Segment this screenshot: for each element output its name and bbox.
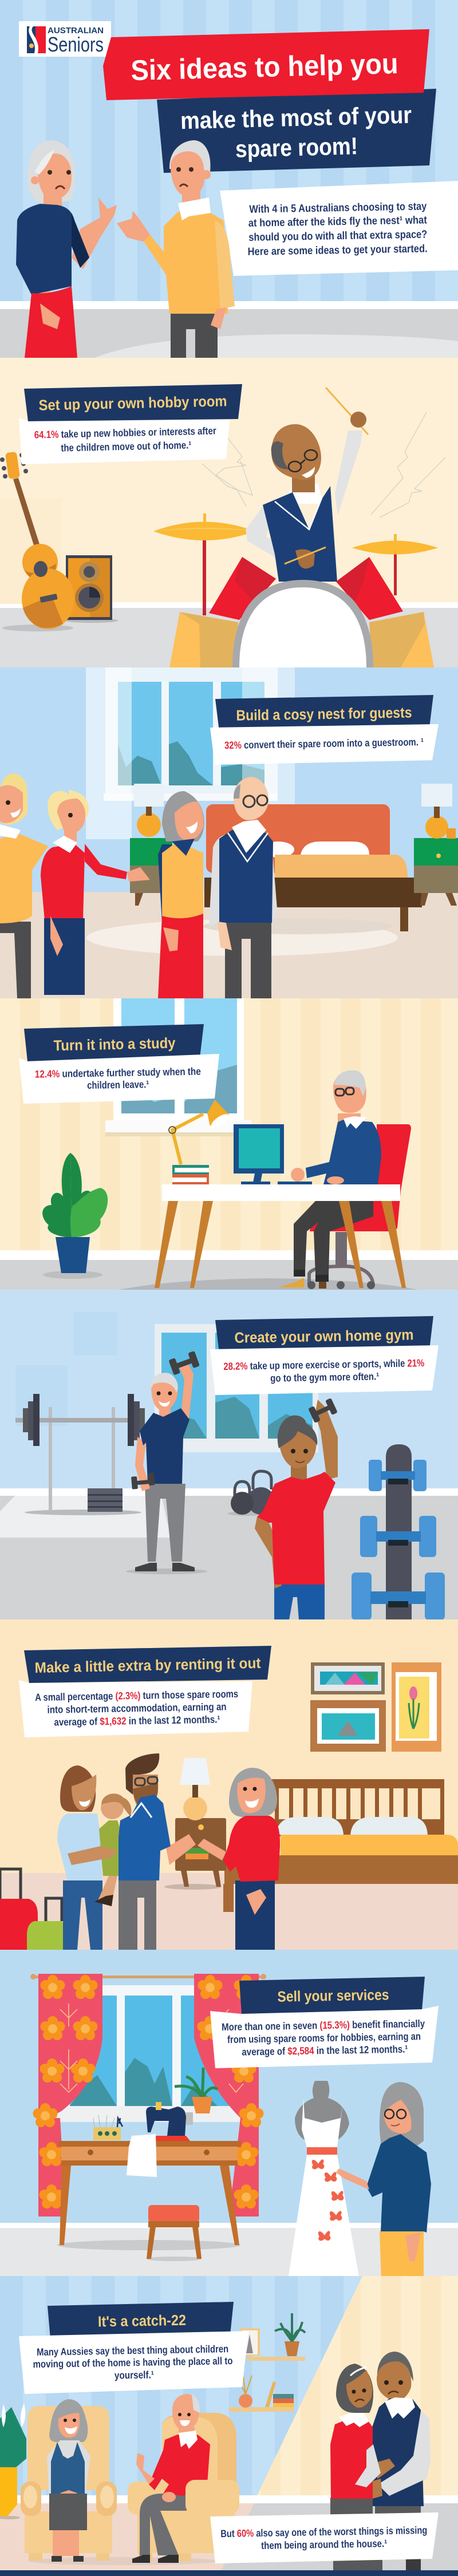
- mannequin and dress: [288, 2081, 360, 2279]
- floor: [0, 1873, 458, 1950]
- wall: [0, 1619, 458, 1873]
- books: [172, 1165, 209, 1185]
- figure: grey-haired woman: [158, 791, 204, 998]
- body text: [35, 1065, 201, 1092]
- floor: [0, 1260, 458, 1290]
- body text: children leave.¹: [87, 1078, 149, 1091]
- logo: Australian Seniors: Seniors: [48, 33, 104, 56]
- body text: 32% convert their spare room into a guestroom. ¹: [224, 736, 424, 751]
- footer bar: [0, 2570, 458, 2576]
- card: [19, 1680, 252, 1737]
- wall: [0, 1290, 458, 1488]
- desk lamp: [169, 1100, 231, 1164]
- floor: [0, 1496, 458, 1620]
- bed: [204, 804, 422, 931]
- plant pot: [175, 2068, 218, 2113]
- heading: It's a catch-22: [98, 2312, 186, 2330]
- wall: [0, 667, 458, 892]
- title: make the most of your: [180, 101, 412, 134]
- speaker: [65, 555, 118, 623]
- body text: [220, 2524, 428, 2552]
- barbell rack: [15, 1394, 145, 1515]
- body text: the children move out of home.¹: [61, 439, 191, 454]
- heading card: gym: [210, 1316, 439, 1395]
- heading: Set up your own hobby room: [38, 392, 227, 414]
- wall shelves: [229, 2313, 305, 2412]
- floor: [0, 2228, 458, 2279]
- intro text: at home after the kids fly the nest¹ what: [248, 214, 428, 230]
- sewing box: [93, 2115, 123, 2140]
- floor: [0, 608, 458, 667]
- card: worst thing: [210, 2512, 439, 2563]
- stool: [147, 2205, 202, 2261]
- floor: [0, 892, 458, 999]
- body text: 28.2% take up more exercise or sports, while 21%: [223, 1357, 424, 1372]
- banner: [48, 2302, 234, 2339]
- figure: drummer: [246, 388, 368, 582]
- cream wall: [0, 2276, 458, 2495]
- figure: man with yellow sweater: [0, 773, 48, 998]
- intro text: [247, 200, 428, 258]
- body text: average of $2,584 in the last 12 months.¹: [242, 2043, 408, 2058]
- intro text: Here are some ideas to get your started.: [247, 243, 428, 258]
- figure: sad man: [358, 2352, 431, 2516]
- body text: go to the gym more often.¹: [270, 1370, 379, 1384]
- body text: [222, 2018, 425, 2058]
- wall: [0, 0, 458, 301]
- card: [210, 724, 439, 765]
- body text: yourself.¹: [114, 2369, 154, 2381]
- dumbbell rack: [352, 1444, 445, 1620]
- banner: [24, 1024, 204, 1061]
- figure: seated woman: [47, 2399, 90, 2562]
- body text: average of $1,632 in the last 12 months.¹: [54, 1713, 220, 1728]
- banner: [239, 1977, 425, 2014]
- body text: them being around the house.¹: [261, 2538, 387, 2551]
- heading: Build a cosy nest for guests: [236, 704, 412, 724]
- figure: child: [68, 1793, 131, 1906]
- body text: moving out of the home is having the place all to: [33, 2355, 233, 2370]
- heading card: renting: [19, 1646, 271, 1737]
- lamp: left: [134, 784, 164, 837]
- window: [86, 667, 295, 839]
- kettlebells: [227, 1471, 275, 1516]
- panel: hobby room: [0, 358, 458, 667]
- figure: woman with child: [57, 1765, 102, 1950]
- body text: [223, 1357, 425, 1385]
- floors: [0, 2503, 458, 2572]
- heading: Turn it into a study: [53, 1034, 176, 1054]
- body text: More than one in seven (15.3%) benefit financially: [222, 2018, 425, 2033]
- figure trousers below card: [333, 2556, 421, 2571]
- office chair: [307, 1124, 411, 1289]
- figure: blonde woman: [41, 790, 150, 995]
- heading card: hobby room: [19, 384, 242, 464]
- sewing machine: [146, 2102, 193, 2141]
- panel: intro header: [0, 0, 458, 358]
- body text: from using spare rooms for hobbies, earning an: [227, 2030, 421, 2045]
- intro text: With 4 in 5 Australians choosing to stay: [249, 200, 427, 216]
- card: [210, 1345, 439, 1395]
- title: [131, 48, 412, 163]
- rug: [86, 919, 398, 956]
- window: [57, 1985, 246, 2122]
- logo: Australian Seniors: AUSTRALIAN: [48, 26, 104, 35]
- title: spare room!: [235, 132, 358, 163]
- wall: [0, 998, 458, 1250]
- body text: [35, 1688, 239, 1728]
- body text: Many Aussies say the best thing about children: [37, 2343, 228, 2358]
- picture frames: [310, 1662, 441, 1752]
- figure: man with dumbbells: [126, 1351, 207, 1574]
- logo: Australian Seniors: [19, 21, 111, 57]
- heading card: study: [19, 1024, 219, 1104]
- figure: seated man: [132, 2394, 239, 2563]
- fabric: [127, 2134, 157, 2177]
- heading card: services: [210, 1977, 439, 2068]
- heading: Make a little extra by renting it out: [34, 1654, 261, 1676]
- figure: man with glasses: [209, 777, 278, 998]
- nightstand: right: [414, 838, 458, 906]
- armchair: right: [128, 2413, 236, 2561]
- figure: dressmaker: [336, 2082, 431, 2279]
- wall: [0, 1950, 458, 2223]
- card: [19, 1054, 219, 1104]
- monitor and keyboard: [234, 1124, 312, 1185]
- cymbals: [153, 513, 438, 615]
- banner: [215, 1316, 433, 1353]
- nightstand and lamp: [164, 1758, 226, 1890]
- wall: [0, 358, 458, 602]
- heading: Sell your services: [277, 1986, 389, 2005]
- panel: renting: [0, 1619, 458, 1950]
- luggage: [0, 1869, 64, 1950]
- title banner: navy: [157, 89, 436, 173]
- figure: worried man: [117, 140, 235, 358]
- nightstand: left: [130, 838, 172, 906]
- guitar: [0, 452, 74, 631]
- card: [19, 418, 230, 464]
- plant: [42, 1153, 108, 1279]
- title: Six ideas to help you: [131, 48, 398, 86]
- figure: woman with dumbbell: [255, 1398, 338, 1620]
- body text: into short-term accommodation, earning an: [47, 1701, 227, 1716]
- sound lines: [202, 412, 445, 517]
- armchair: left: [21, 2406, 218, 2565]
- window: [155, 1324, 318, 1452]
- heading card: guests: [210, 695, 439, 765]
- body text: 64.1% take up new hobbies or interests after: [34, 425, 216, 441]
- window: [105, 998, 251, 1136]
- blue wall: [0, 2276, 362, 2495]
- bed: [223, 1779, 458, 1912]
- panel: catch-22: [0, 2276, 458, 2576]
- panel: study: [0, 998, 458, 1290]
- banner: [24, 384, 242, 421]
- heading: Create your own home gym: [234, 1326, 414, 1346]
- body text: A small percentage (2.3%) turn those spare rooms: [35, 1688, 238, 1703]
- drum kit: [169, 557, 434, 667]
- panel: home gym: [0, 1290, 458, 1620]
- heading card: catch-22: [19, 2302, 248, 2394]
- intro text: should you do with all that extra space?: [248, 228, 427, 244]
- card: [19, 2331, 248, 2394]
- floor: [0, 309, 458, 358]
- figure: host woman: [198, 1768, 280, 1950]
- figure: sad woman: [330, 2364, 381, 2515]
- card: [210, 2006, 439, 2068]
- potted plant: [0, 2403, 26, 2519]
- desk: [155, 1184, 406, 1288]
- body text: 12.4% undertake further study when the: [35, 1065, 201, 1080]
- figure: young man: [119, 1753, 196, 1950]
- panel: sell your services: [0, 1950, 458, 2279]
- intro card: [220, 181, 458, 276]
- body text: [34, 425, 216, 455]
- title banner: red: [103, 29, 429, 100]
- figure: worried woman: [16, 140, 117, 358]
- panel: guest room: [0, 667, 458, 999]
- sewing table: [57, 2141, 241, 2250]
- banner: [24, 1646, 271, 1683]
- curtains: [30, 1974, 266, 2217]
- banner: [215, 695, 433, 732]
- figure: man at desk: [279, 1070, 381, 1289]
- body text: [33, 2343, 233, 2383]
- lamp: right: [421, 784, 456, 839]
